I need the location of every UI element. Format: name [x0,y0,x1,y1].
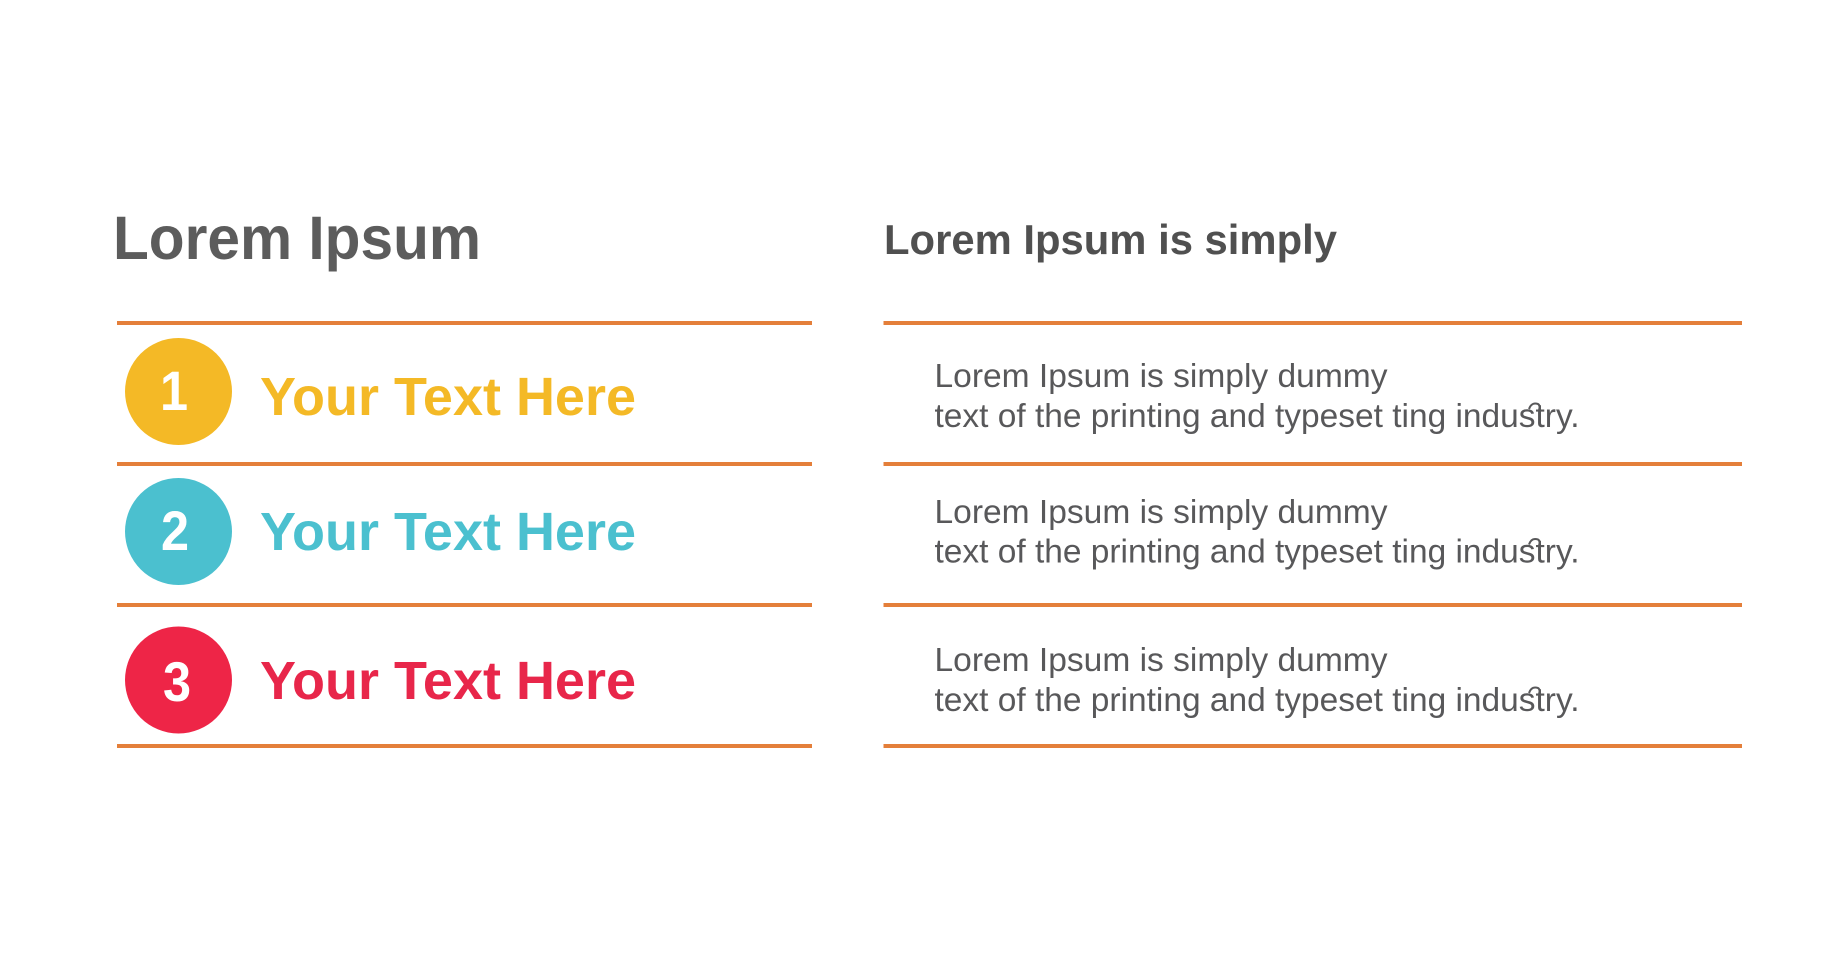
item 1: number badge and label: 1 [160,361,188,423]
left heading: Lorem Ipsum [113,204,481,272]
item 3: number badge and label: Your Text Here [260,651,636,711]
description 1 [934,358,1580,435]
panel: left column list [117,321,812,748]
item 1: number badge and label [125,338,636,445]
panel: right column descriptions [884,321,1742,748]
item 2: number badge and label: Your Text Here [260,502,636,562]
item 2: number badge and label: 2 [161,501,189,563]
description 1: text of the printing and typeset ting industry. [934,398,1580,435]
item 2: number badge and label [125,478,636,585]
right heading: Lorem Ipsum is simply [884,216,1338,263]
description 2 [934,494,1580,570]
item 1: number badge and label: Your Text Here [260,367,636,427]
description 2: Lorem Ipsum is simply dummy [934,494,1388,531]
item 3: number badge and label [125,626,636,734]
description 3: text of the printing and typeset ting industry. [934,682,1580,719]
description 3 [934,642,1580,719]
description 3: Lorem Ipsum is simply dummy [934,642,1388,679]
description 1: Lorem Ipsum is simply dummy [934,358,1388,395]
description 2: text of the printing and typeset ting industry. [934,534,1580,570]
item 3: number badge and label: 3 [163,652,191,714]
